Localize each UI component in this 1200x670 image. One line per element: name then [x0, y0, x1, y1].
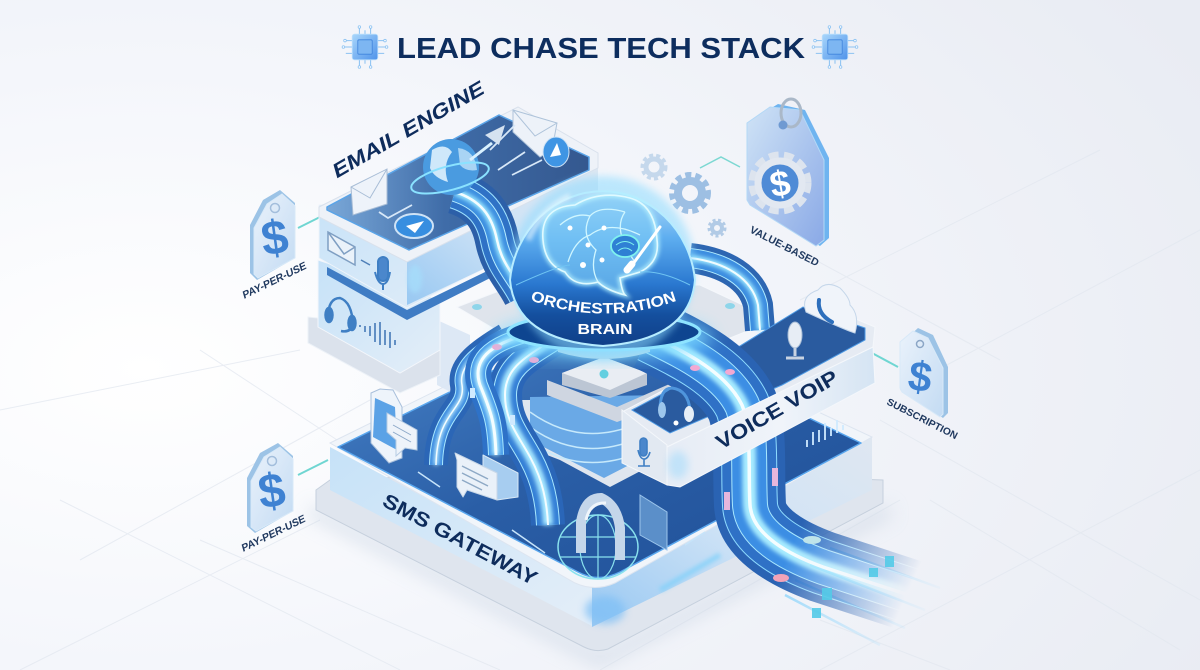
data flows: email and back: [455, 192, 760, 330]
label: PAY-PER-USE: [242, 260, 308, 302]
price tag: subscription: $: [905, 352, 935, 401]
stack: email engine: [308, 76, 598, 393]
icon: small brain: [611, 235, 639, 257]
icon: envelope left: [351, 169, 387, 215]
icon: shield panel: [640, 495, 667, 550]
price tag: value-based: [700, 99, 829, 269]
label: ORCHESTRATION: [532, 291, 676, 314]
plate: [327, 115, 589, 250]
title: [342, 26, 858, 68]
price tag: pay-per-use sms: [241, 443, 328, 555]
price tag: value-based: $: [767, 162, 794, 205]
heading: LEAD CHASE TECH STACK: [397, 33, 805, 65]
icon: phone: [371, 389, 417, 463]
price tag: pay-per-use sms: $: [255, 463, 289, 520]
icon: microphone front: [375, 257, 390, 290]
icon: microphone front: [638, 438, 650, 466]
icon: envelope front: [328, 232, 355, 265]
icon: microphone top: [786, 322, 804, 358]
price tag: pay-per-use email: $: [258, 210, 292, 267]
icon: envelope right: [513, 110, 557, 157]
arrows: [418, 472, 705, 553]
icon: left chip: [342, 26, 388, 68]
icon: send button right: [543, 137, 569, 167]
label: SMS GATEWAY: [379, 490, 542, 591]
floor: [338, 318, 861, 578]
arrows: [379, 125, 542, 218]
panel: voice voip label band: [622, 347, 875, 487]
upper tier: [319, 190, 520, 308]
price tag: pay-per-use email: [242, 190, 320, 302]
lower tier: [318, 260, 440, 373]
icon: chat bubbles: [455, 453, 518, 500]
icon: waveform: [360, 322, 395, 348]
label: BRAIN: [578, 321, 632, 338]
price tag: subscription: [872, 328, 959, 442]
data flow: voice: [650, 335, 940, 645]
orchestration brain dome: [488, 172, 720, 369]
icon: gears: [642, 156, 725, 236]
icon: headset top: [658, 388, 694, 426]
brain: [516, 195, 690, 295]
panel: voice voip: [622, 284, 875, 447]
icon: globe with arch: [558, 498, 638, 579]
icon: right chip: [812, 26, 858, 68]
label: PAY-PER-USE: [241, 513, 307, 555]
icon: wand: [630, 227, 660, 268]
data flows: sms side: [436, 335, 560, 525]
label: EMAIL ENGINE: [331, 76, 486, 184]
icon: paper plane: [485, 125, 505, 145]
label: VALUE-BASED: [748, 224, 821, 269]
icon: globe: [408, 139, 492, 200]
arrow: [361, 260, 370, 265]
icon: headset: [326, 298, 356, 331]
deck: [622, 303, 875, 447]
central tower: [437, 285, 775, 487]
icon: waveform: [807, 420, 843, 447]
label: SUBSCRIPTION: [885, 397, 959, 442]
platform: sms gateway: [310, 310, 890, 660]
icon: send button left: [395, 214, 433, 238]
label: VOICE VOIP: [712, 366, 842, 454]
icon: cloud with phone: [804, 284, 857, 333]
